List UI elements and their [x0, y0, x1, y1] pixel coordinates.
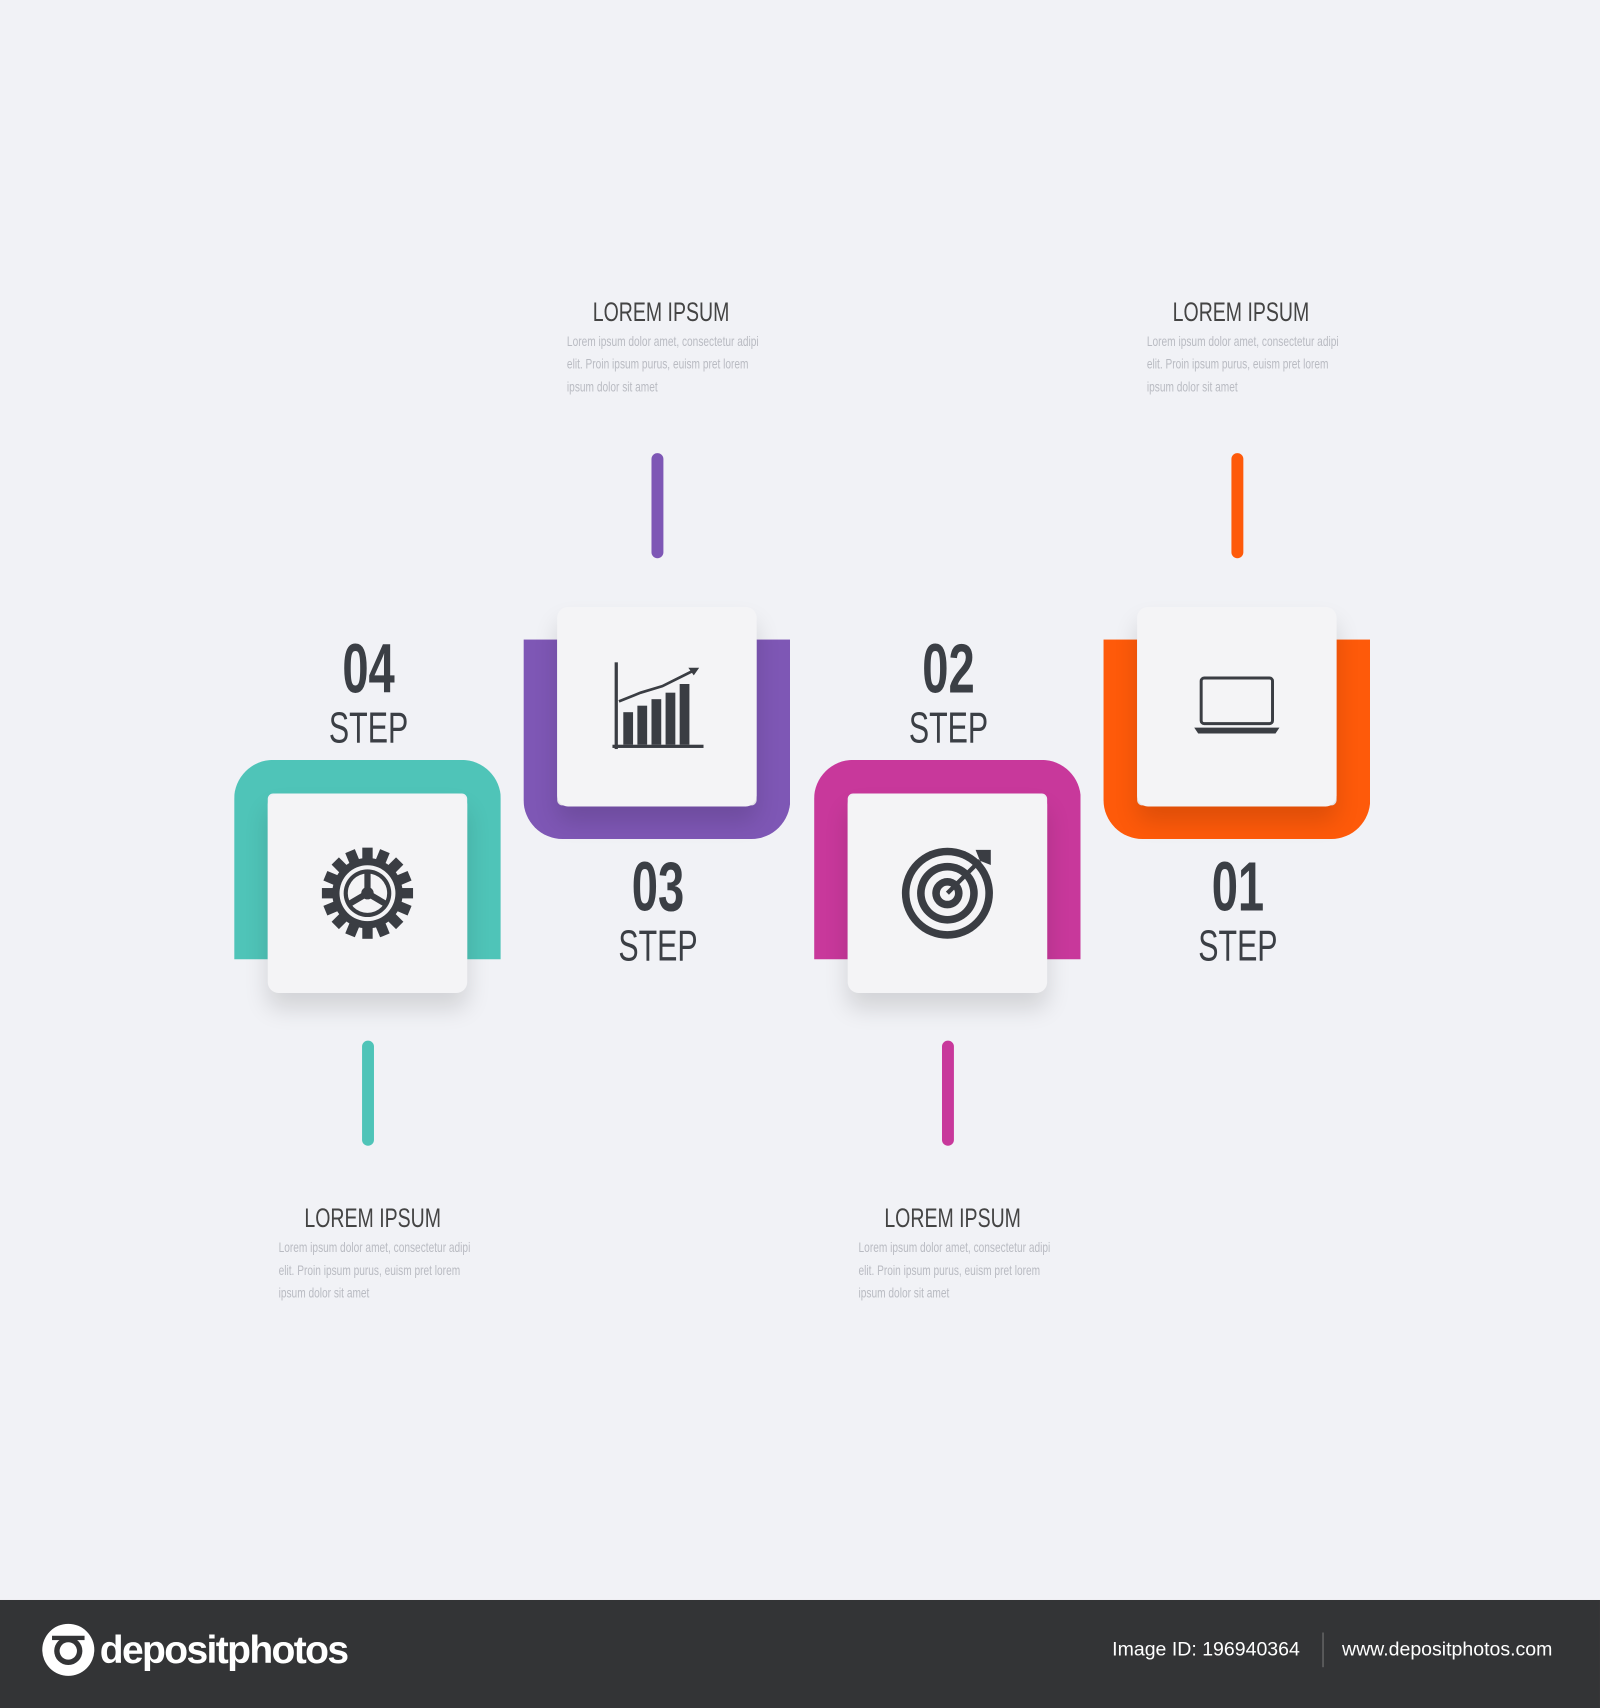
step 3 text: ipsum dolor sit amet: [567, 378, 658, 395]
step 1 number: [1198, 848, 1278, 970]
step 4 number: [329, 630, 408, 752]
step 2 card with target icon: [848, 793, 1047, 993]
footer bar: [0, 1600, 1600, 1708]
step 3 number: [618, 848, 698, 970]
step 3 text: [567, 297, 759, 395]
step 4 number: STEP: [329, 705, 408, 752]
step 1 text: [1147, 297, 1339, 395]
step 4 text: ipsum dolor sit amet: [279, 1285, 369, 1301]
step 2 text: LOREM IPSUM: [884, 1203, 1021, 1234]
step 4 number: 04: [342, 630, 395, 708]
step 1: [1104, 453, 1370, 970]
step 4 text: LOREM IPSUM: [304, 1203, 441, 1234]
step 2 text: elit. Proin ipsum purus, euism pret lorem: [859, 1262, 1040, 1278]
step 2 text: Lorem ipsum dolor amet, consectetur adipi: [859, 1239, 1050, 1255]
step 4 text: elit. Proin ipsum purus, euism pret lorem: [279, 1262, 460, 1278]
logo: depositphotos: [100, 1627, 347, 1672]
step 2 connector: [942, 1041, 954, 1146]
step 1 text: elit. Proin ipsum purus, euism pret lorem: [1147, 356, 1328, 372]
step 1 number: 01: [1212, 848, 1264, 926]
step 4 card with gear icon: [268, 793, 467, 993]
step 2 text: ipsum dolor sit amet: [859, 1285, 949, 1301]
step 2 frame: [814, 760, 1081, 959]
step 2 number: 02: [922, 630, 975, 708]
step 2 text: [859, 1203, 1050, 1301]
step 1 text: ipsum dolor sit amet: [1147, 378, 1238, 395]
step 4: [234, 630, 501, 1146]
image id: Image ID: 196940364: [1112, 1638, 1300, 1660]
step 3 text: elit. Proin ipsum purus, euism pret lorem: [567, 356, 749, 372]
step 3 text: Lorem ipsum dolor amet, consectetur adipi: [567, 333, 759, 349]
step 2: [814, 630, 1080, 1146]
step 3 number: 03: [632, 848, 684, 926]
step 4 text: Lorem ipsum dolor amet, consectetur adipi: [279, 1239, 470, 1255]
step 4 connector: [362, 1041, 374, 1146]
logo: [42, 1624, 348, 1676]
step 1 card with laptop icon: [1137, 607, 1337, 806]
step 1 text: LOREM IPSUM: [1173, 297, 1309, 327]
step 3 connector: [651, 453, 663, 558]
step 1 frame: [1104, 640, 1370, 839]
step 3: [524, 453, 790, 970]
step 4 frame: [234, 760, 501, 959]
step 3 card with chart icon: [557, 607, 757, 806]
step 3 frame: [524, 640, 790, 839]
step 3 text: LOREM IPSUM: [593, 297, 729, 327]
step 1 number: STEP: [1198, 922, 1278, 970]
step 2 number: STEP: [909, 705, 988, 752]
step 1 text: Lorem ipsum dolor amet, consectetur adipi: [1147, 333, 1339, 349]
step 2 number: [909, 630, 988, 752]
site url: www.depositphotos.com: [1342, 1638, 1552, 1660]
step 4 text: [279, 1203, 470, 1301]
step 3 number: STEP: [618, 922, 698, 970]
step 1 connector: [1231, 453, 1243, 558]
